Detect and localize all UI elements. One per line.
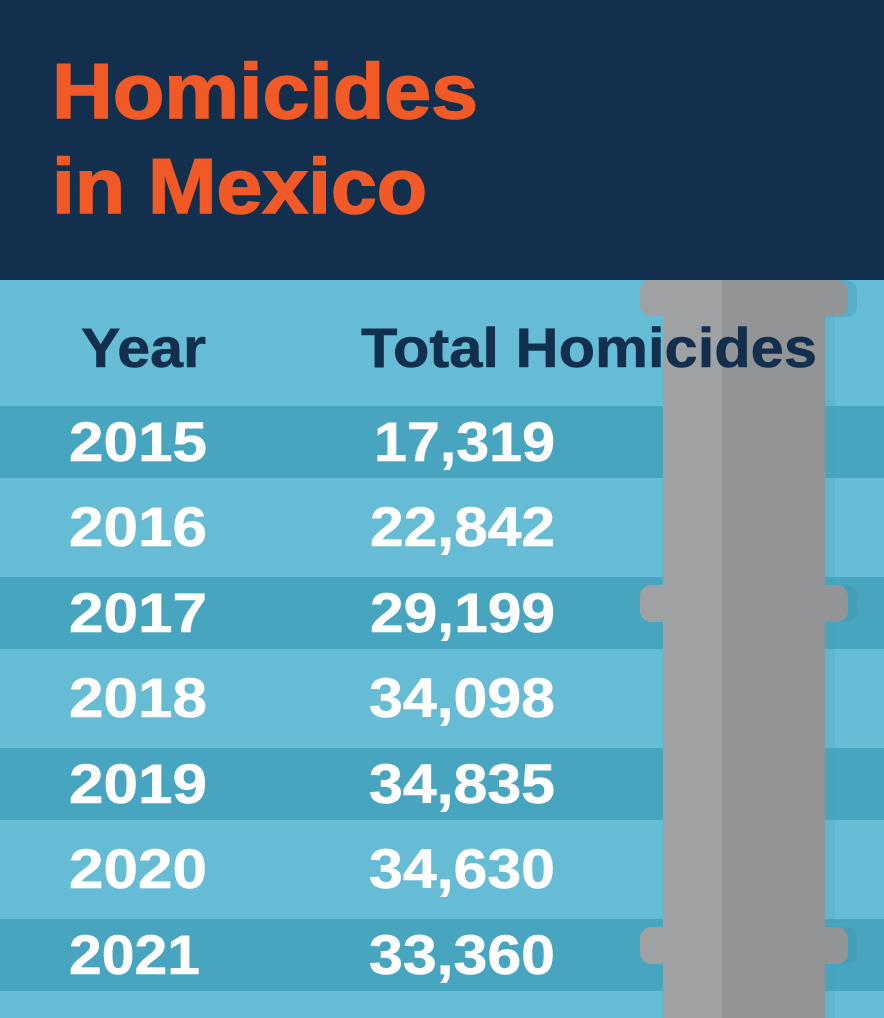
title: in Mexico [52,142,427,230]
panel: table background [0,280,884,1018]
icon: grey pillar [640,280,848,1018]
years column: 2021 [69,923,200,986]
homicide totals column: 34,835 [369,752,555,815]
column headings [81,316,817,379]
homicide totals column: 34,098 [369,666,555,729]
column headings: Year [81,316,206,379]
homicide totals column [369,410,555,986]
homicide totals column: 29,199 [370,581,555,644]
years column: 2018 [69,666,207,729]
column headings: Total Homicides [361,316,817,379]
homicide totals column: 17,319 [374,410,555,473]
years column: 2016 [69,495,207,558]
years column: 2015 [69,410,207,473]
homicide totals column: 22,842 [370,495,555,558]
title: Homicides [52,47,478,135]
years column: 2017 [69,581,207,644]
title [52,47,478,230]
homicide totals column: 33,360 [369,923,555,986]
homicide totals column: 34,630 [369,837,555,900]
panel: title banner [0,0,884,280]
table row bands [0,406,884,991]
column shadow [760,280,857,1018]
years column [69,410,207,986]
years column: 2020 [69,837,207,900]
years column: 2019 [69,752,207,815]
